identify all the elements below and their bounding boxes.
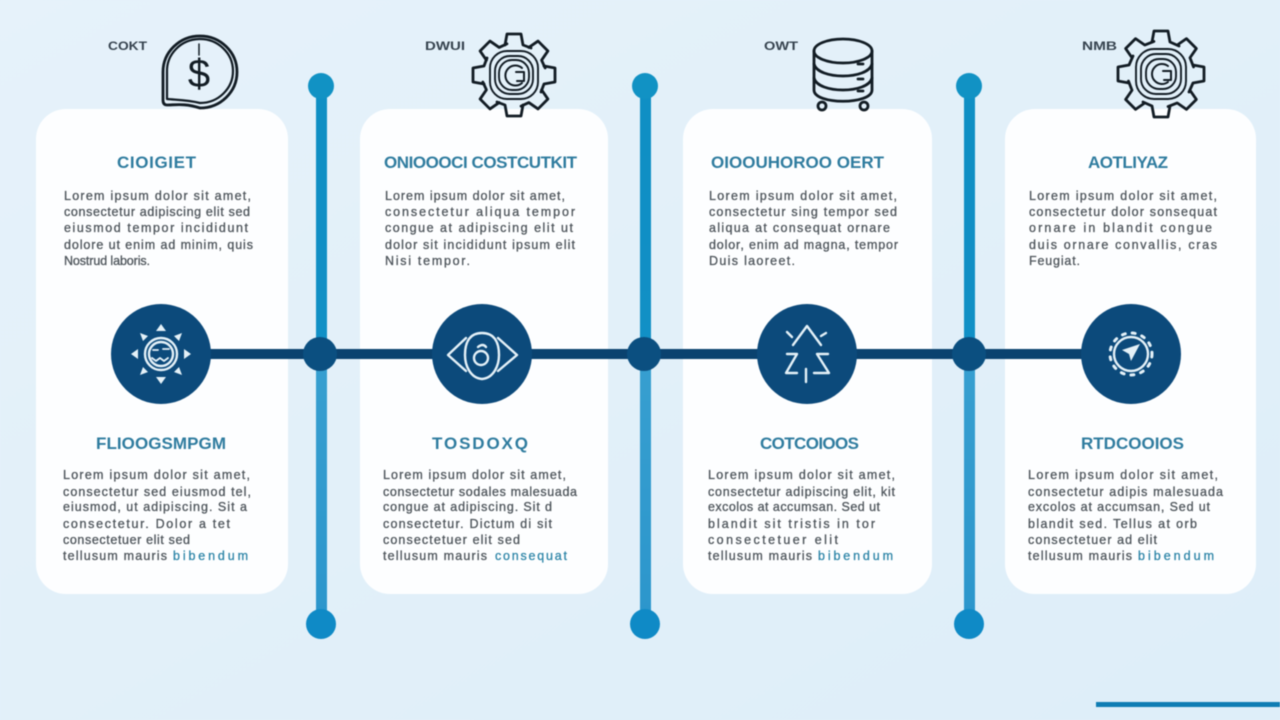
text block: card 2 top: consectetur aliqua tempor [385,205,575,219]
horizontal timeline [161,349,1131,359]
text block: card 4 top: consectetur dolor sonsequat [1029,205,1218,219]
text block: card 3 bottom: consectetuer elit [708,533,839,547]
text block: card 2 bottom: tellusum mauris [383,549,487,563]
icon node 4: compass [1081,304,1181,404]
text block: card 2 bottom: consectetur. Dictum di sit [383,517,553,531]
text block: card 2 bottom: consectetur sodales malesuada [383,485,577,499]
text block: card 4 top [1029,189,1218,268]
text block: card 3 bottom: bibendum [818,549,893,563]
text block: card 2 top: dolor sit incididunt ipsum elit [385,238,576,252]
text block: card 1 top: Nostrud laboris. [64,254,150,268]
heading: card 2 bottom: TOSDOXQ [432,434,528,453]
text block: card 1 top [64,189,253,268]
text block: card 3 top [709,189,898,268]
panel: card 3 [683,109,932,594]
text block: card 4 bottom: bibendum [1138,549,1214,563]
heading: card 2 top: ONIOOOCI COSTCUTKIT [384,153,578,172]
text block: card 4 bottom: Lorem ipsum dolor sit amet, [1028,468,1218,482]
footer accent bar [1096,702,1280,707]
text block: card 4 bottom: tellusum mauris [1028,549,1132,563]
text block: card 4 bottom: consectetur adipis malesuada [1028,485,1223,499]
text block: card 2 top: congue at adipiscing elit ut [385,221,574,235]
heading: card 3 bottom: COTCOIOOS [760,434,859,453]
icon: dollar speech bubble: $ [188,52,210,96]
junction node 2 [627,337,661,371]
text block: card 4 bottom [1028,468,1223,563]
heading: card 4 top: AOTLIYAZ [1088,153,1168,172]
text block: card 1 top: consectetur adipiscing elit sed [64,205,250,219]
text block: card 2 bottom: consectetuer elit sed [383,533,520,547]
icon node 3: recycle triangle [757,304,857,404]
vertical timeline 2 [630,73,660,639]
text block: card 2 top [385,189,576,268]
text block: card 1 bottom: Lorem ipsum dolor sit amet, [63,468,250,482]
text block: card 3 bottom: tellusum mauris [708,549,812,563]
heading: card 1 bottom: FLIOOGSMPGM [96,434,226,453]
icon: gear 4 [1118,31,1204,117]
text block: card 2 bottom: Lorem ipsum dolor sit amet, [383,468,566,482]
panel: card 4 [1005,109,1256,594]
text block: card 3 top: consectetur sing tempor sed [709,205,897,219]
text block: card 2 bottom: congue at adipiscing. Sit d [383,500,552,514]
text block: card 4 top: Feugiat. [1029,254,1080,268]
text block: card 4 bottom: consectetuer ad elit [1028,533,1158,547]
vertical timeline 1 [306,73,336,639]
text block: card 1 bottom: bibendum [173,549,248,563]
text block: card 3 bottom [708,468,896,563]
text block: card 3 top: Duis laoreet. [709,254,795,268]
text block: card 3 bottom: blandit sit tristis in tor [708,517,875,531]
icon: database [814,39,872,110]
top label 1: COKT [108,39,148,53]
heading: card 3 top: OIOOUHOROO OERT [711,153,885,172]
text block: card 2 bottom [383,468,577,563]
heading: card 1 top: CIOIGIET [117,153,197,172]
icon node 2: eye [432,304,532,404]
text block: card 1 bottom: eiusmod, ut adipiscing. Sit a [63,500,247,514]
text block: card 2 bottom: consequat [495,549,568,563]
heading: card 4 bottom: RTDCOOIOS [1081,434,1184,453]
icon: gear 2 [473,34,555,116]
text block: card 3 bottom: Lorem ipsum dolor sit amet, [708,468,895,482]
junction node 3 [952,337,986,371]
text block: card 3 bottom: excolos at accumsan. Sed ut [708,500,881,514]
junction node 1 [303,337,337,371]
panel: card 2 [360,109,608,594]
text block: card 1 top: eiusmod tempor incididunt [64,221,249,235]
text block: card 4 bottom: excolos at accumsan, Sed ut [1028,500,1211,514]
text block: card 3 top: Lorem ipsum dolor sit amet, [709,189,897,203]
text block: card 1 bottom: consectetur. Dolor a tet [63,517,231,531]
text block: card 1 top: Lorem ipsum dolor sit amet, [64,189,251,203]
text block: card 1 bottom [63,468,251,563]
text block: card 2 top: Lorem ipsum dolor sit amet, [385,189,565,203]
text block: card 4 bottom: blandit sed. Tellus at orb [1028,517,1197,531]
top label 4: NMB [1082,39,1117,53]
text block: card 1 bottom: tellusum mauris [63,549,167,563]
text block: card 1 bottom: consectetur sed eiusmod tel, [63,485,251,499]
vertical timeline 3 [954,73,984,639]
text block: card 4 top: ornare in blandit congue [1029,221,1212,235]
text block: card 3 bottom: consectetur adipiscing elit, kit [708,485,896,499]
top label 3: OWT [764,39,799,53]
text block: card 4 top: Lorem ipsum dolor sit amet, [1029,189,1217,203]
icon node 1: sun [111,304,211,404]
text block: card 3 top: aliqua at consequat ornare [709,221,890,235]
text block: card 4 top: duis ornare convallis, cras [1029,238,1217,252]
text block: card 1 top: dolore ut enim ad minim, quis [64,238,253,252]
text block: card 2 top: Nisi tempor. [385,254,470,268]
panel: card 1 [36,109,288,594]
text block: card 1 bottom: consectetuer elit sed [63,533,190,547]
text block: card 3 top: dolor, enim ad magna, tempor [709,238,898,252]
icon: dollar speech bubble [163,36,237,108]
top label 2: DWUI [425,39,465,53]
